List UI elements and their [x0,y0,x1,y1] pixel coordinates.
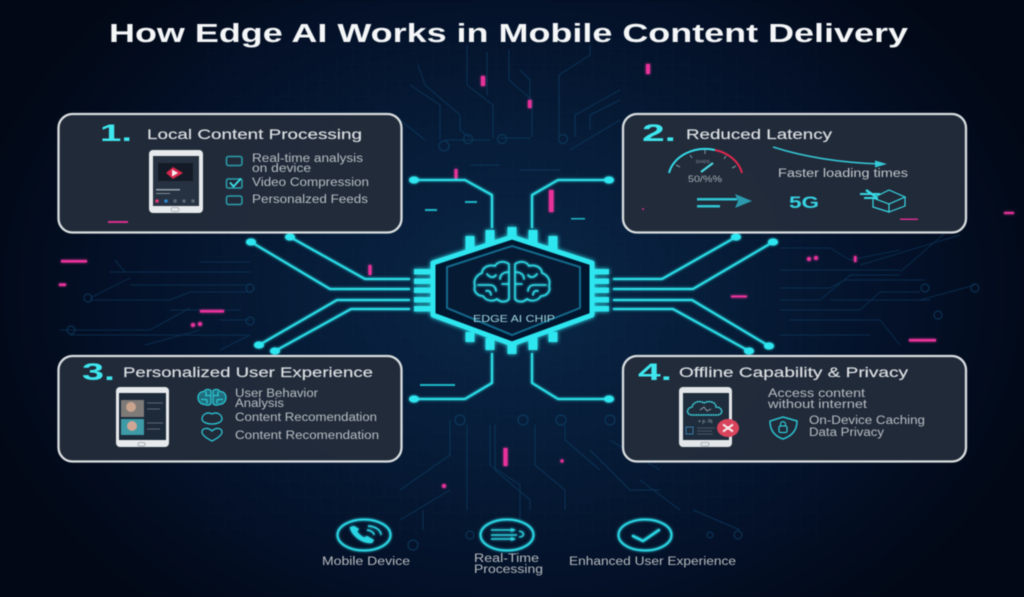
heading: Offline Capability & Privacy [679,364,908,380]
icon: brain [474,262,550,302]
icon: data streams [480,520,534,550]
panel: reduced latency [623,114,966,232]
short cyan dashes [420,201,585,386]
title: How Edge AI Works in Mobile Content Delivery [109,20,909,48]
panel: offline capability and privacy [623,356,966,462]
access text: Access content [768,388,866,400]
feature list: Content Recomendation [235,430,379,442]
step number 3: 3. [82,359,115,386]
badge: real-time processing [474,520,543,576]
badge: mobile device [322,520,410,568]
feature list: Video Compression [252,177,369,189]
feature list: User Behavior [235,388,318,400]
feature list: Real-time analysis [252,153,363,165]
label: Real-Time [474,553,539,565]
arrow: speed [697,194,752,208]
feature list [252,153,369,206]
feature list: Analysis [235,398,284,410]
feature list: Content Recomendation [235,412,377,424]
checkbox list [226,156,242,204]
icon: checkmark [618,520,672,550]
feature list: on device [252,163,311,175]
privacy text: On-Device Caching [809,415,925,427]
icon: offline phone: + p -% [698,419,713,425]
central chip [414,227,609,354]
label: Enhanced User Experience [569,556,736,568]
chip label: EDGE AI CHIP [473,314,555,325]
icon: recommendation hearts [202,413,222,441]
heading: Local Content Processing [147,126,362,142]
magenta accents [59,64,1014,488]
heading: Personalized User Experience [123,364,373,380]
badge: enhanced user experience [569,520,736,568]
feature list [235,388,379,442]
icon: phone with photos [116,387,169,447]
panel: local content processing [58,114,402,232]
icon: phone with video [149,150,203,213]
hexagon body [433,237,592,344]
inner hexagon [447,246,580,335]
step number 4: 4. [638,359,672,386]
icon: speed gauge: DAIDS [696,159,710,164]
label [474,553,543,576]
chip pins [414,227,609,354]
feature list: Personalzed Feeds [252,194,368,206]
heading: Reduced Latency [686,126,832,142]
icon: delivery box [860,190,905,212]
text: faster loading: Faster loading times [778,168,908,180]
label: Mobile Device [322,556,410,568]
arrow: falling latency [773,147,887,168]
privacy text: Data Privacy [809,427,884,439]
icon: speed gauge: 50/%% [688,174,723,185]
access text [767,388,868,411]
privacy text [809,415,925,439]
icon: offline phone [679,387,739,447]
text: 5G: 5G [789,193,819,212]
panel: personalized user experience [58,356,402,462]
icon: shield [770,417,797,439]
icon: phone call [338,520,390,550]
icon: small brain [198,389,226,405]
icon: speed gauge [669,149,742,185]
step number 2: 2. [642,120,676,147]
label: Processing [474,564,543,576]
step number 1: 1. [100,120,132,147]
access text: without internet [767,399,868,411]
connector traces [246,176,778,402]
